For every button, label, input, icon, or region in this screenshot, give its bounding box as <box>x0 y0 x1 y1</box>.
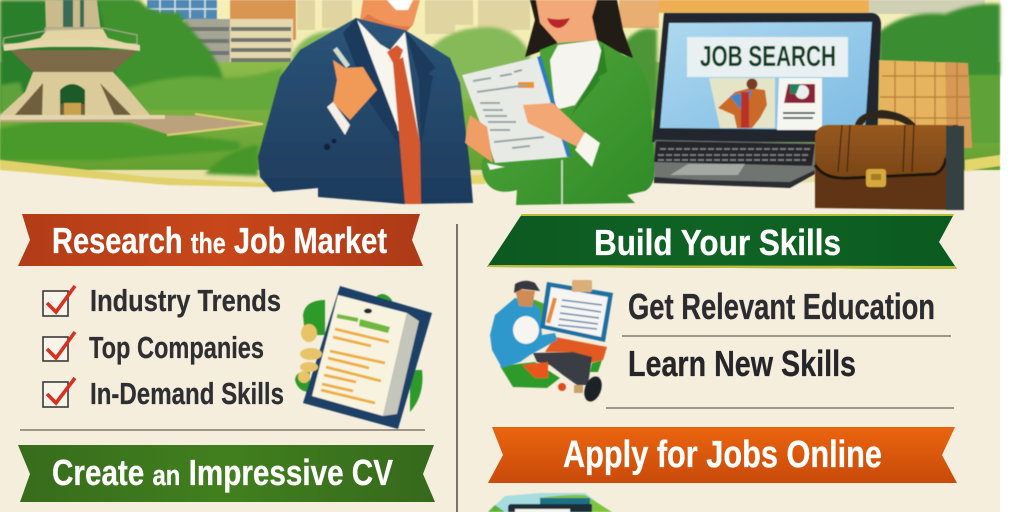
icon: park monument tower <box>0 0 165 120</box>
icon: clipboard with cv <box>295 286 432 429</box>
list: research checklist <box>43 283 284 411</box>
icon: laptop with job search screen <box>652 13 881 188</box>
job search label: JOB SEARCH <box>700 41 836 73</box>
figure: woman in green jacket <box>482 0 655 205</box>
checklist item: in-demand skills: In-Demand Skills <box>90 376 284 411</box>
text: get relevant education: Get Relevant Education <box>628 286 935 327</box>
checklist item: industry trends <box>43 283 281 318</box>
job search label <box>687 37 848 77</box>
checklist item: industry trends: Industry Trends <box>90 283 281 318</box>
laptop screen picture <box>709 78 775 128</box>
banner: create an impressive cv: Create an Impressive CV <box>52 452 393 493</box>
icon: person studying with notes <box>490 280 613 404</box>
icon: online application laptop <box>488 493 612 512</box>
banner: build your skills <box>487 214 957 269</box>
banner: apply for jobs online <box>488 427 957 483</box>
icon: hands holding resume <box>465 103 600 170</box>
checklist item: in-demand skills <box>43 376 284 411</box>
icon: brown briefcase <box>815 110 964 210</box>
panel: park and city scene <box>0 0 1000 187</box>
banner: research the job market: Research the Job Market <box>52 220 387 261</box>
figure: man in navy suit <box>258 0 473 204</box>
banner: create an impressive cv <box>18 445 435 502</box>
icon: stacked cardboard boxes <box>878 60 972 148</box>
banner: apply for jobs online: Apply for Jobs Online <box>563 434 882 476</box>
laptop screen logo card <box>777 78 822 130</box>
checklist item: top companies <box>43 330 264 365</box>
banner: build your skills: Build Your Skills <box>594 222 841 263</box>
icon: resume held by woman <box>462 56 571 163</box>
text: learn new skills: Learn New Skills <box>628 343 856 384</box>
checklist item: top companies: Top Companies <box>89 330 264 365</box>
